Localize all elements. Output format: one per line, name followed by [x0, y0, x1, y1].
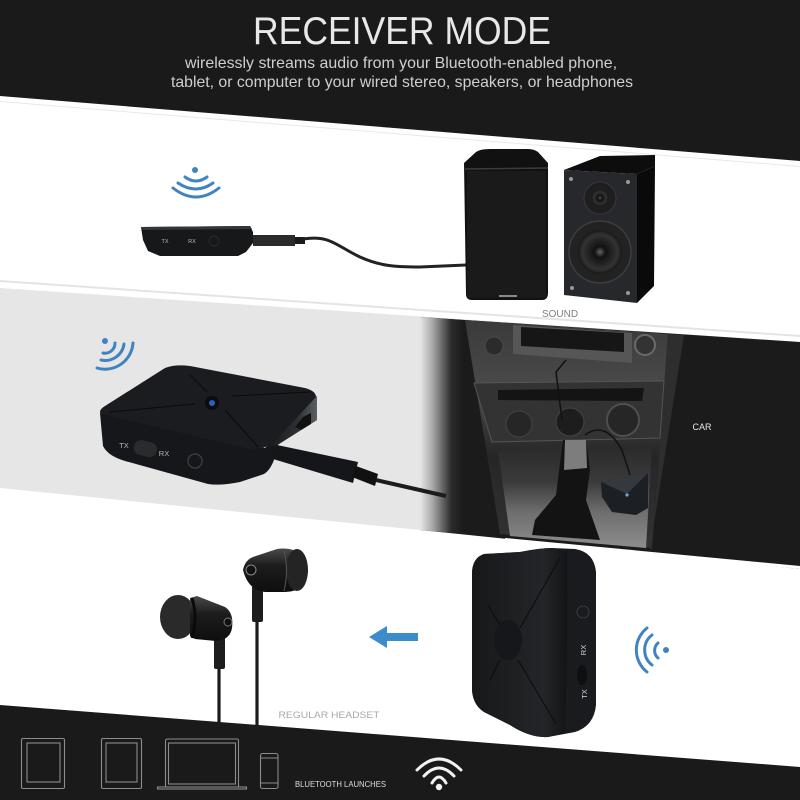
floor tray: [498, 446, 652, 548]
earbud: right: [243, 548, 308, 727]
screen: [513, 325, 632, 363]
radio band: [474, 381, 664, 442]
icon: laptop: [158, 739, 246, 789]
label: car: CAR: [692, 422, 712, 432]
small receiver device: RX: [188, 239, 196, 245]
panel: headset section divider: [505, 538, 800, 569]
icons: source devices: [22, 738, 278, 789]
speaker: back grille: [464, 149, 548, 300]
plug and cable of large device: [273, 445, 446, 496]
front view device: [472, 548, 596, 737]
icon: wireless signal above small device: [173, 167, 219, 197]
icon: tablet portrait: [102, 738, 142, 788]
car cable: [556, 360, 630, 475]
speaker: front with drivers: [564, 155, 655, 303]
subtitle: [171, 55, 633, 91]
earbud: left: [160, 595, 232, 725]
panel: car section grey background: [0, 288, 800, 568]
small receiver device: [141, 226, 305, 256]
icon: tablet landscape: [22, 738, 64, 788]
knobs: [506, 411, 532, 437]
front view device: TX: [580, 689, 589, 699]
subtitle: wirelessly streams audio from your Bluetooth-enabled phone,: [184, 55, 617, 72]
panel: sound section: [141, 149, 655, 320]
divider strip: [0, 280, 800, 337]
icon: phone: [260, 754, 278, 788]
label: regular headset: REGULAR HEADSET: [278, 710, 380, 721]
gear lever: [532, 440, 600, 540]
panel: car interior photo: [420, 317, 800, 569]
small receiver device: TX: [161, 239, 169, 245]
large receiver device: TX: [119, 441, 129, 450]
subtitle: tablet, or computer to your wired stereo, speakers, or headphones: [171, 74, 633, 91]
panel: bottom device band: [0, 705, 800, 800]
panel: top header band: [0, 0, 800, 161]
cable to speaker: [303, 238, 466, 267]
front view device: RX: [579, 645, 588, 655]
dashboard console: [465, 320, 668, 548]
icon: wireless signal near large device: [97, 338, 133, 369]
title: RECEIVER MODE: [253, 10, 551, 53]
mini device: [601, 473, 648, 515]
label: sound: SOUND: [542, 309, 578, 320]
large receiver device: RX: [159, 449, 169, 458]
label: bluetooth launches: BLUETOOTH LAUNCHES: [295, 779, 386, 789]
large receiver device: [100, 365, 317, 485]
icon: wifi: [417, 759, 461, 790]
arrow: left blue: [369, 626, 418, 648]
icon: wireless signal right: [636, 628, 669, 672]
